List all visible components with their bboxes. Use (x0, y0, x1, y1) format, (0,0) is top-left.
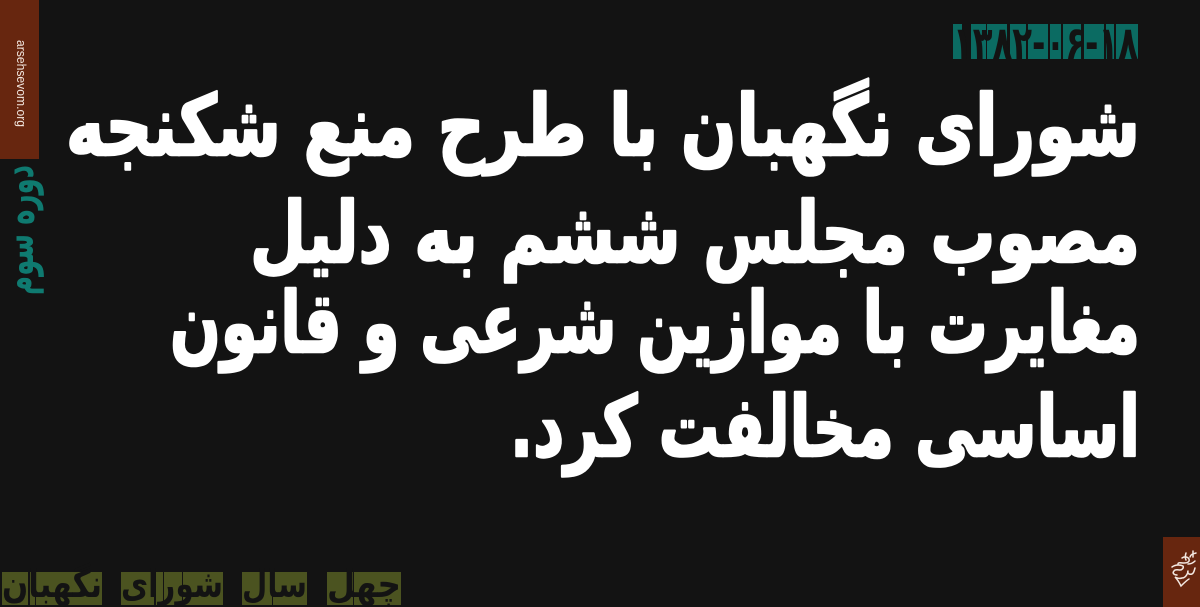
panel: website tab (0, 0, 39, 159)
headline (66, 77, 1140, 477)
word 2: سال (242, 562, 307, 606)
word 4: نگهبان (2, 562, 102, 606)
date stamp (953, 16, 1138, 70)
series title strip (2, 562, 401, 606)
website address: arsehsevom.org (14, 40, 28, 127)
word 3: شورای (121, 562, 223, 606)
icon: calligraphic logo (1172, 551, 1196, 586)
panel: logo tab (1163, 537, 1200, 607)
series title text (2, 562, 401, 606)
word 1: چهل (327, 562, 401, 606)
